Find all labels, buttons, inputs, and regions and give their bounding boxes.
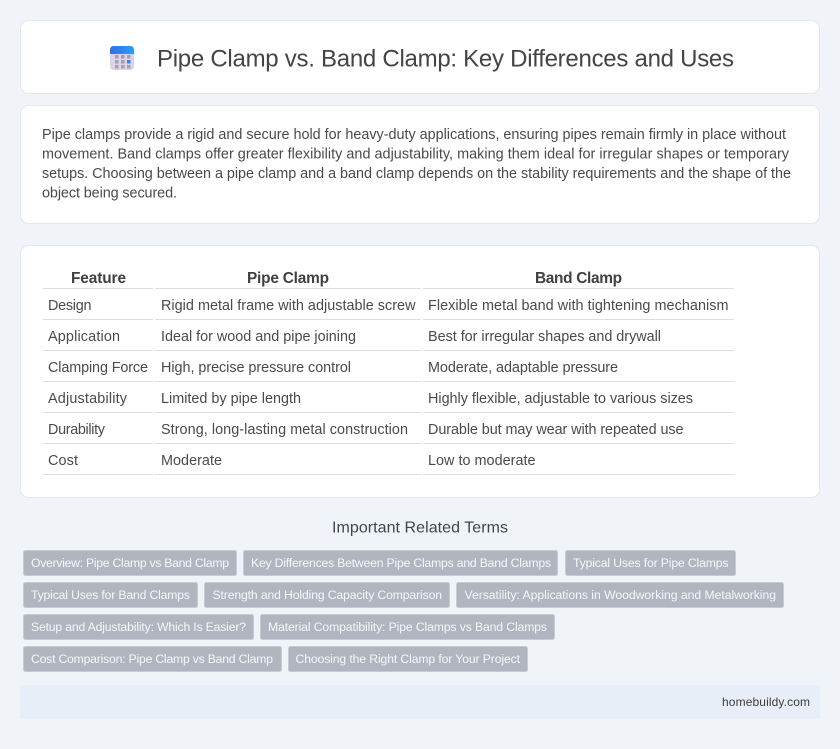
table row: durability: Durable but may wear with repeated use <box>428 422 684 438</box>
tag: uses for band clamps: Typical Uses for Band Clamps <box>31 588 190 602</box>
tag: cost comparison: Cost Comparison: Pipe Clamp vs Band Clamp <box>31 652 273 666</box>
table header: Pipe Clamp <box>247 270 329 287</box>
tag: choosing <box>288 646 528 672</box>
table row: durability: Durability <box>48 422 106 438</box>
table row: clamping force <box>48 360 618 376</box>
tag: overview <box>24 550 236 576</box>
panel: comparison table <box>20 246 820 498</box>
tag: key differences <box>244 550 558 576</box>
text block: intro paragraph: object being secured. <box>42 186 177 202</box>
table header: Band Clamp <box>535 270 622 287</box>
tag: setup: Setup and Adjustability: Which Is Easier? <box>31 620 246 634</box>
table row: clamping force: Moderate, adaptable pressure <box>428 360 618 376</box>
panel: intro text <box>20 106 820 224</box>
table row: application: Application <box>48 329 120 345</box>
text block: intro paragraph: movement. Band clamps offer greater flexibility and adjustability, making them ideal for irregular shapes or temporary <box>42 146 790 162</box>
tag: cost comparison <box>24 646 282 672</box>
tag: setup <box>24 614 254 640</box>
table row: design <box>48 298 728 314</box>
tag: uses for pipe clamps <box>566 550 736 576</box>
tag: versatility <box>456 582 784 608</box>
table row: adjustability: Highly flexible, adjustable to various sizes <box>428 391 693 407</box>
tag: overview: Overview: Pipe Clamp vs Band Clamp <box>31 556 229 570</box>
table row: clamping force: High, precise pressure control <box>161 360 351 376</box>
related terms tags <box>24 550 784 672</box>
icon: calendar grid <box>110 46 134 70</box>
table row: design: Design <box>48 298 92 314</box>
table row: adjustability: Adjustability <box>48 391 128 407</box>
tag: uses for band clamps <box>24 582 198 608</box>
tag: strength <box>204 582 450 608</box>
table row: durability <box>48 422 684 438</box>
footer: homebuildy.com <box>722 695 810 709</box>
table header: Feature <box>71 270 126 287</box>
tag: versatility: Versatility: Applications in Woodworking and Metalworking <box>464 588 776 602</box>
tag: uses for pipe clamps: Typical Uses for Pipe Clamps <box>573 556 728 570</box>
heading: related terms: Important Related Terms <box>332 520 508 536</box>
title: Pipe Clamp vs. Band Clamp: Key Differences and Uses <box>157 46 734 72</box>
text block: intro paragraph <box>42 127 791 202</box>
text block: intro paragraph: Pipe clamps provide a rigid and secure hold for heavy-duty applications, ensuring pipes remain firmly in place without <box>42 127 786 143</box>
table row: adjustability: Limited by pipe length <box>161 391 301 407</box>
tag: strength: Strength and Holding Capacity Comparison <box>212 588 442 602</box>
table row: adjustability <box>48 391 693 407</box>
table row: application: Best for irregular shapes and drywall <box>428 329 661 345</box>
tag: choosing: Choosing the Right Clamp for Your Project <box>296 652 521 666</box>
table header <box>71 270 622 287</box>
table row: design: Rigid metal frame with adjustable screw <box>161 298 416 314</box>
tag: key differences: Key Differences Between Pipe Clamps and Band Clamps <box>251 556 551 570</box>
table row: application: Ideal for wood and pipe joining <box>161 329 356 345</box>
footer <box>20 685 820 719</box>
text block: intro paragraph: setups. Choosing between a pipe clamp and a band clamp depends on the stability requirements and the shape of the <box>42 166 791 182</box>
panel: header <box>20 20 820 94</box>
table row: cost: Moderate <box>161 453 222 469</box>
tag: material compatibility <box>260 614 554 640</box>
table row: clamping force: Clamping Force <box>48 360 148 376</box>
table row: design: Flexible metal band with tightening mechanism <box>428 298 728 314</box>
table row: durability: Strong, long-lasting metal construction <box>161 422 408 438</box>
table row: cost <box>48 453 536 469</box>
table row: cost: Low to moderate <box>428 453 536 469</box>
tag: material compatibility: Material Compatibility: Pipe Clamps vs Band Clamps <box>268 620 547 634</box>
table row: cost: Cost <box>48 453 78 469</box>
table row: application <box>48 329 661 345</box>
